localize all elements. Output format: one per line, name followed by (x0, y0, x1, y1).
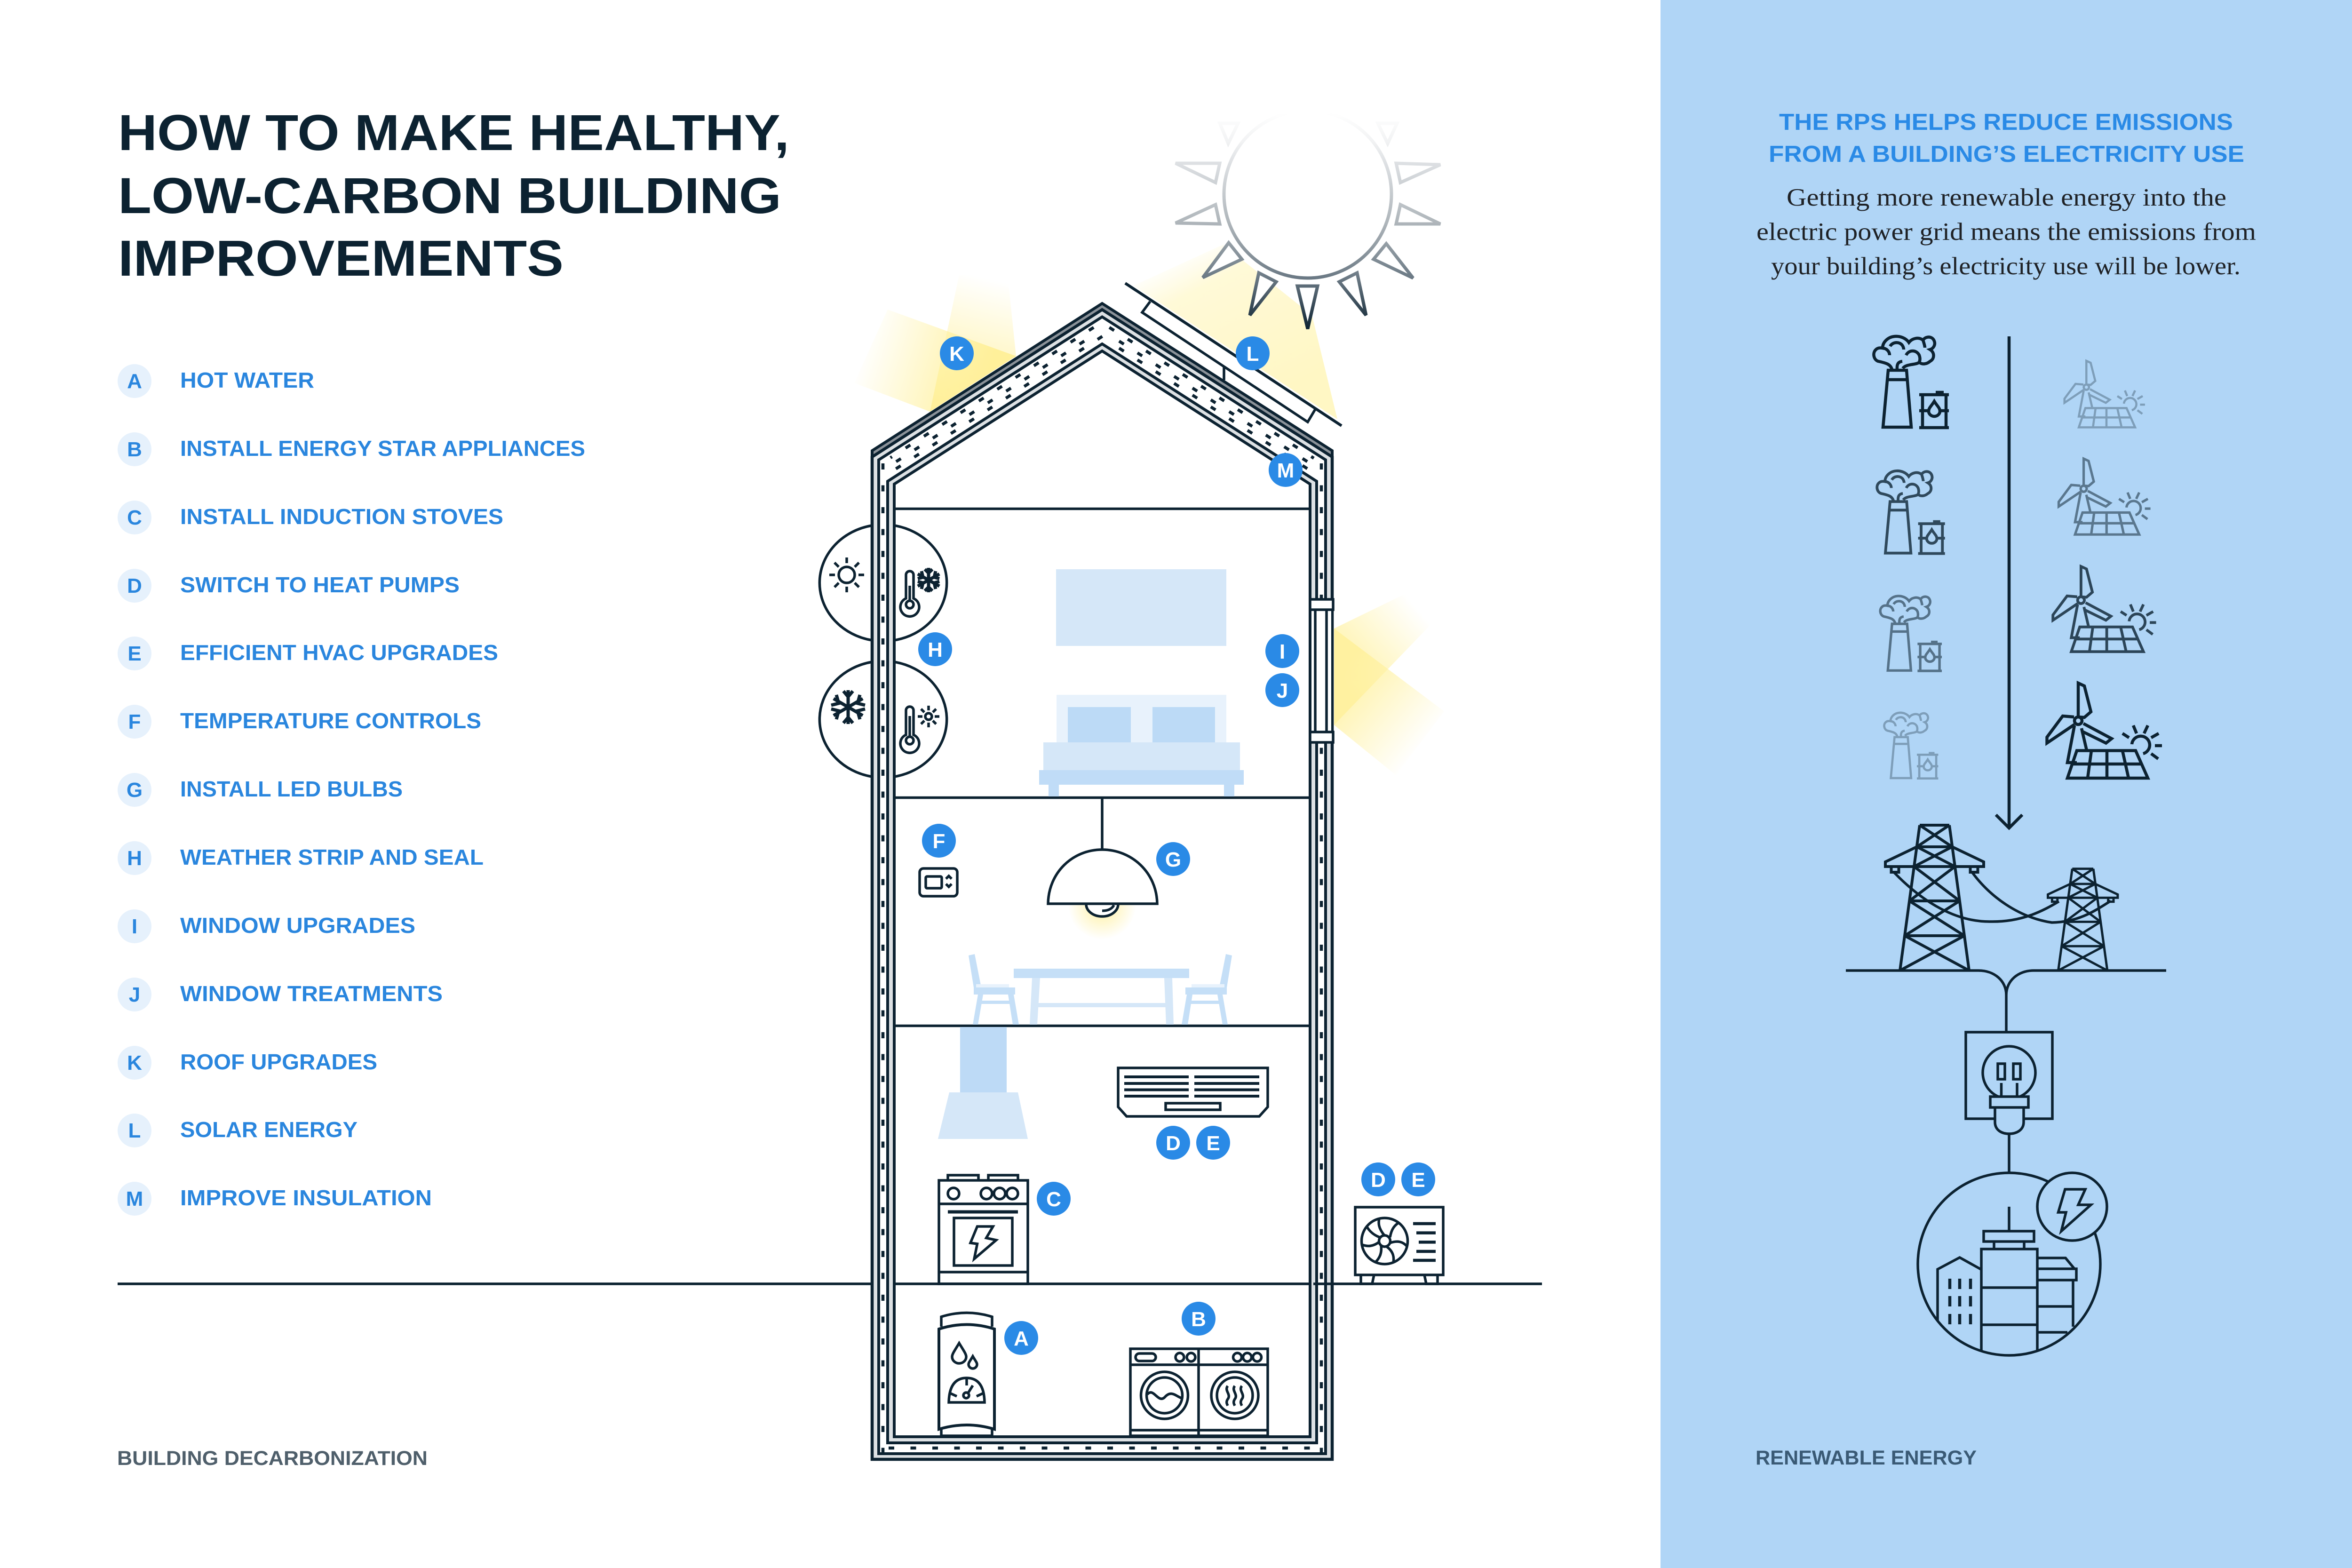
badge J (1265, 673, 1299, 707)
title (118, 104, 789, 287)
badge D indoor: D (1166, 1132, 1181, 1155)
icon: thermometer warm (900, 707, 919, 753)
badge B: B (1191, 1308, 1206, 1331)
house structure (118, 303, 1542, 1459)
legend item I (118, 909, 415, 943)
central tower (1981, 1207, 2037, 1351)
floors (894, 509, 1310, 1026)
heading: RPS (1769, 110, 2244, 167)
icon: fossil plant 3 (1880, 596, 1942, 671)
badge H: H (928, 638, 943, 661)
badge D outdoor (1361, 1162, 1395, 1196)
legend item L: SOLAR ENERGY (180, 1117, 358, 1142)
insulation dashes (883, 327, 1321, 1454)
title: LOW-CARBON BUILDING (118, 167, 781, 224)
badge G: G (1165, 848, 1181, 871)
badge F: F (933, 830, 945, 853)
grid line and feed cable (1846, 971, 2166, 1032)
outer wall shell (872, 310, 1332, 1459)
icon: fossil plant 4 (1884, 713, 1938, 779)
icon: fossil plant 1 (1874, 336, 1949, 428)
title: IMPROVEMENTS (118, 230, 564, 287)
body text (1756, 184, 2256, 280)
icon: induction stove (939, 1175, 1028, 1284)
icon: renewables 2 (2058, 459, 2151, 534)
icon: small sun (918, 706, 939, 727)
window (1310, 599, 1333, 742)
lightning badge (2037, 1173, 2107, 1241)
right chair (1182, 954, 1232, 1025)
badge A: A (1014, 1327, 1029, 1350)
legend item J: WINDOW TREATMENTS (180, 981, 443, 1006)
badge L: L (1247, 342, 1259, 366)
legend item D: SWITCH TO HEAT PUMPS (180, 573, 460, 597)
body text: electric power grid means the emissions from (1756, 218, 2256, 246)
heading: RPS: THE RPS HELPS REDUCE EMISSIONS (1779, 110, 2233, 135)
badge E indoor (1196, 1126, 1230, 1160)
legend item G: G (127, 779, 143, 802)
legend item E (118, 637, 498, 670)
badge A (1004, 1321, 1038, 1355)
icon: renewables 4 (2047, 683, 2162, 778)
legend item D (118, 569, 460, 603)
legend item F (118, 705, 481, 739)
icon: outlet and plug (1966, 1032, 2052, 1172)
legend item J (118, 978, 443, 1011)
badge J: J (1277, 679, 1288, 702)
icon: thermostat (920, 868, 957, 896)
badge G (1156, 842, 1190, 876)
legend item H (118, 841, 484, 875)
badge H (918, 632, 952, 666)
legend item B (118, 432, 585, 466)
dining furniture (969, 954, 1232, 1025)
badge C: C (1046, 1188, 1061, 1211)
icon: snowflake small (918, 568, 939, 592)
sunlight beam on solar panel (1134, 245, 1337, 419)
footer label: renewable energy: RENEWABLE ENERGY (1756, 1447, 1977, 1469)
legend item G (118, 773, 403, 807)
icon: pendant lamp (1048, 798, 1157, 916)
arrow: transition downward (1996, 336, 2022, 828)
body text: Getting more renewable energy into the (1787, 184, 2226, 211)
legend item C: C (127, 506, 142, 529)
badge E outdoor (1401, 1162, 1435, 1196)
badge K (940, 336, 974, 370)
icon: city buildings in circle (1918, 1173, 2107, 1355)
solar panel (1125, 283, 1342, 426)
legend item B: INSTALL ENERGY STAR APPLIANCES (180, 436, 585, 461)
icon: snowflake outside (831, 690, 865, 724)
legend item B: B (127, 438, 142, 461)
legend item J: J (129, 983, 140, 1006)
icon: thermometer cool (900, 571, 919, 616)
legend item K: ROOF UPGRADES (180, 1050, 377, 1074)
panel: renewable energy (1661, 0, 2352, 1568)
small tower (2048, 869, 2118, 971)
icon: renewables 1 (2065, 361, 2145, 427)
icon: sun (1176, 111, 1440, 329)
legend item M: IMPROVE INSULATION (180, 1186, 432, 1210)
badge M (1269, 453, 1303, 487)
legend item M (118, 1182, 432, 1216)
power wires (1894, 873, 2111, 923)
footer label: building decarbonization: BUILDING DECARBONIZATION (117, 1447, 428, 1470)
body text: your building’s electricity use will be lower. (1771, 253, 2241, 280)
range hood (938, 1027, 1028, 1139)
legend item F: TEMPERATURE CONTROLS (180, 708, 481, 733)
badge L (1236, 336, 1270, 370)
legend item L: L (128, 1119, 141, 1142)
legend item I: I (132, 915, 137, 938)
legend item C (118, 501, 503, 534)
interior (894, 351, 1310, 1437)
lamp glow (1068, 872, 1136, 939)
legend item K: K (127, 1051, 142, 1075)
attic storage furniture (988, 432, 1206, 508)
legend item E: EFFICIENT HVAC UPGRADES (180, 640, 498, 665)
left building (1938, 1258, 1981, 1321)
legend item A (118, 364, 314, 398)
callout badges on house (918, 336, 1435, 1355)
legend item I: WINDOW UPGRADES (180, 913, 415, 938)
legend item K (118, 1046, 377, 1080)
ground line (118, 1282, 1542, 1285)
badge I (1265, 634, 1299, 668)
badge M: M (1277, 459, 1294, 482)
legend item E: E (127, 642, 142, 665)
badge E indoor: E (1206, 1132, 1220, 1155)
legend item H: H (127, 847, 142, 870)
badge F (922, 824, 956, 858)
large tower (1885, 825, 1984, 971)
icon: wall air conditioner (1118, 1068, 1268, 1116)
legend list (118, 364, 585, 1216)
legend item A: A (127, 370, 142, 393)
legend item G: INSTALL LED BULBS (180, 777, 403, 801)
painting (1056, 569, 1226, 646)
legend item H: WEATHER STRIP AND SEAL (180, 845, 484, 869)
icon: washer and dryer (1130, 1349, 1268, 1436)
weather seal dial: cold outside (819, 662, 947, 777)
sunlight beams on roof (854, 275, 1016, 412)
right building (2038, 1258, 2076, 1332)
icon: renewables 3 (2053, 566, 2156, 652)
inner wall band (888, 344, 1317, 1443)
badge K: K (949, 342, 964, 366)
icon: transmission towers (1885, 825, 2118, 971)
left chair (969, 954, 1019, 1025)
bed (1039, 695, 1244, 796)
badge D outdoor: D (1371, 1169, 1386, 1192)
badge B (1182, 1302, 1216, 1336)
title: HOW TO MAKE HEALTHY, (118, 104, 789, 161)
icon: fossil plant 2 (1877, 471, 1945, 554)
badge I: I (1279, 640, 1285, 663)
insulation cavity (879, 317, 1326, 1454)
icon: outdoor heat pump (1355, 1207, 1443, 1284)
legend item F: F (128, 710, 141, 733)
heading: RPS: FROM A BUILDING’S ELECTRICITY USE (1769, 142, 2244, 167)
bedroom furniture (1039, 569, 1244, 796)
badge D indoor (1156, 1126, 1190, 1160)
icon: water heater (939, 1313, 994, 1436)
legend item M: M (126, 1187, 143, 1210)
badge C (1037, 1182, 1071, 1216)
weather seal dial: hot outside (819, 525, 947, 640)
roof shingle band (872, 303, 1332, 457)
badge E outdoor: E (1411, 1169, 1425, 1192)
legend item L (118, 1114, 358, 1147)
legend item C: INSTALL INDUCTION STOVES (180, 504, 503, 529)
icon: sun outside (829, 557, 864, 592)
legend item A: HOT WATER (180, 368, 314, 392)
sunlight beams through window (1334, 594, 1444, 775)
legend item D: D (127, 574, 142, 597)
